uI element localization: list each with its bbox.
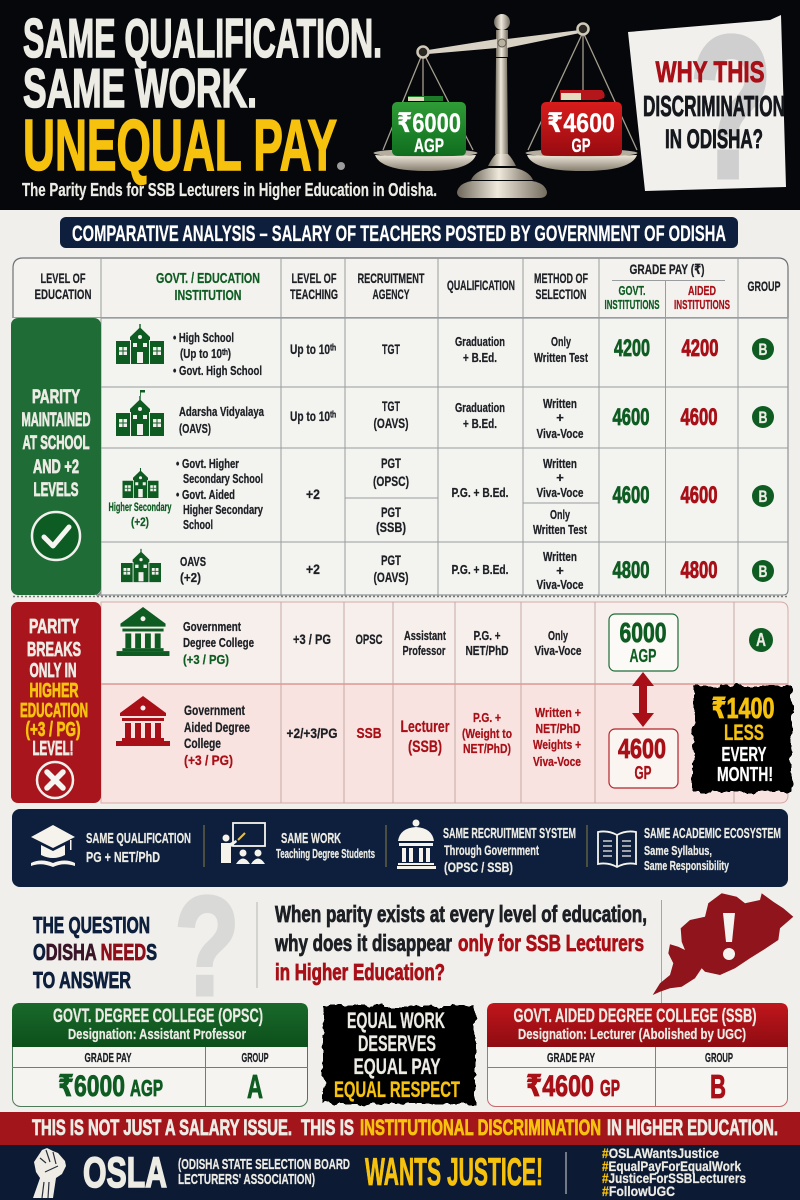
row: government aided degree college: 4600 [618,733,666,764]
icon: graduation cap [31,825,75,867]
table header: LEVEL OF [292,270,337,286]
red weight label [547,108,615,157]
row: higher secondary: (SSB) [376,519,406,535]
title: SAME QUALIFICATION. [23,7,382,69]
question text: in Higher Education? [275,959,445,985]
row: government aided degree college: NET/PhD) [463,741,511,756]
icon: open book [598,831,636,867]
text: same recruitment system [443,825,576,875]
row: higher secondary: P.G. + B.Ed. [452,485,508,500]
row: oavs +2: PGT [381,552,401,568]
row: high school: + B.Ed. [463,350,497,365]
icon: large question mark: ? [174,867,240,1026]
row: high school: (Up to 10ᵗʰ) [180,346,231,361]
row: government aided degree college: Lecturer [400,717,450,736]
callout: 1400 less every month: LESS [724,720,764,745]
arrow: pay gap [632,672,654,727]
question heading: ODISHA NEEDS [33,939,157,965]
text: same recruitment system: Through Government [444,842,539,858]
subtitle: The Parity Ends for SSB Lecturers in Higher Education in Odisha. [22,180,437,200]
panel: parity maintained: PARITY [32,387,80,408]
card: government aided degree college: ₹4600 [526,1070,594,1103]
row: government degree college: Only [548,628,569,643]
row: government degree college: Viva-Voce [534,643,582,658]
row: higher secondary: Viva-Voce [536,485,584,500]
callout: equal work equal pay: EQUAL WORK [347,1008,445,1033]
row: government degree college: P.G. + [474,628,501,643]
table header: INSTITUTIONS [604,297,660,312]
callout: equal work equal pay: EQUAL PAY [354,1054,441,1079]
row: government degree college: (+3 / PG) [183,652,229,667]
callout: equal work equal pay: EQUAL RESPECT [334,1077,460,1102]
green weight label: AGP [414,136,444,157]
table header: GOVT. [618,283,646,298]
callout: why this discrimination [628,0,786,222]
card: government degree college: GROUP [242,1050,269,1065]
text: same work [276,830,375,861]
row: government aided degree college: Written + [535,705,581,720]
card: government degree college: A [247,1068,263,1105]
row: adarsha vidyalaya: TGT [382,398,400,414]
header panel [0,0,800,222]
banner: institutional discrimination: THIS IS [301,1115,354,1140]
row: adarsha vidyalaya: Written [543,396,577,411]
row: oavs +2: (+2) [180,570,201,585]
panel: parity maintained: MAINTAINED [22,410,90,431]
question text: When parity exists at every level of education, [275,901,647,927]
row: adarsha vidyalaya: (OAVS) [179,421,211,436]
comparison table lower: higher education [11,602,792,803]
row: government aided degree college: Aided Degree [184,719,250,735]
row: oavs +2: (OAVS) [374,569,408,585]
row: oavs +2: Viva-Voce [536,577,584,592]
text: same recruitment system: (OPSC / SSB) [444,859,513,875]
text: same academic ecosystem [644,825,781,873]
row: adarsha vidyalaya: Graduation [455,400,505,415]
row: government aided degree college [116,696,678,788]
table header: GROUP [748,278,780,294]
row: government aided degree college: Viva-Voce [533,754,581,769]
table header: INSTITUTION [174,287,242,304]
card: government aided degree college: GROUP [705,1050,733,1065]
row: oavs +2: B [758,562,768,581]
card: government aided degree college [487,1003,788,1106]
table header: SELECTION [536,286,586,302]
row: oavs +2: +2 [306,561,320,577]
panel: parity breaks: PARITY [29,616,79,638]
row: higher secondary: PGT [381,504,401,520]
text: same qualification [86,830,191,866]
table header [34,261,780,312]
row: adarsha vidyalaya: (OAVS) [374,415,408,431]
row: government aided degree college: Weights + [533,737,581,752]
question text: only for SSB Lecturers [458,930,644,956]
row: government aided degree college: College [184,735,221,751]
table header: GRADE PAY (₹) [630,261,704,277]
callout: 1400 less every month: EVERY [722,744,767,766]
row: government aided degree college: NET/PhD [536,721,580,736]
row: high school: TGT [382,341,400,357]
text: same work: Teaching Degree Students [276,846,375,861]
row: higher secondary: Written Test [533,522,587,537]
row: adarsha vidyalaya: Adarsha Vidyalaya [179,404,265,419]
red weight label: ₹4600 [547,108,615,138]
row: government degree college: Government [183,619,242,634]
card: government degree college [12,1003,308,1106]
row: government degree college: +3 / PG [293,631,331,647]
icon: odisha map [653,893,793,1003]
callout: 1400 less every month: ₹1400 [712,693,774,725]
organisation name: OSLA [83,1149,167,1197]
card: government aided degree college: B [710,1068,726,1105]
row: oavs +2: 4800 [680,557,718,584]
row: government aided degree college: (Weight to [462,726,512,741]
panel: parity maintained: AND +2 [33,457,79,478]
table header: RECRUITMENT [358,270,425,286]
panel: parity maintained [11,318,101,595]
footer [0,1145,800,1200]
card: government degree college: AGP [130,1075,163,1101]
row: high school: 4200 [614,335,650,362]
question heading: TO ANSWER [33,967,131,993]
table header: INSTITUTIONS [674,297,730,312]
comparison table upper [11,258,788,596]
row: government aided degree college: (+3 / PG) [184,752,233,768]
row: adarsha vidyalaya: 4600 [680,404,718,431]
row: oavs +2 [121,549,774,592]
hashtags: #EqualPayForEqualWork [602,1159,741,1174]
icon: raised fist [33,1148,66,1198]
card: government degree college: GRADE PAY [84,1050,132,1065]
row: government degree college: OPSC [356,631,382,647]
row: high school: • High School [173,330,234,345]
row: government degree college: Degree College [183,635,254,650]
row: government aided degree college: SSB [356,725,382,742]
row: high school: • Govt. High School [173,363,262,378]
card: government degree college: GOVT. DEGREE COLLEGE (OPSC) [53,1006,263,1027]
text: same academic ecosystem: Same Syllabus, [644,843,712,858]
row: higher secondary: PGT [381,455,401,471]
table header: AGENCY [372,286,410,302]
text: same recruitment system: SAME RECRUITMENT SYSTEM [443,825,576,842]
panel: parity maintained: AT SCHOOL [22,433,90,454]
panel: parity breaks [11,602,101,803]
row: higher secondary: 4600 [680,482,718,509]
text: same work: SAME WORK [281,830,341,847]
icon: teacher and students [221,823,265,864]
banner: institutional discrimination: INSTITUTIONAL DISCRIMINATION [360,1115,601,1140]
row: higher secondary: Written [543,456,577,471]
organisation name: LECTURERS' ASSOCIATION) [178,1171,315,1188]
panel: parity breaks: BREAKS [27,639,81,661]
row: adarsha vidyalaya [116,390,774,441]
row: higher secondary: 4600 [612,482,650,509]
card: government aided degree college: GRADE PAY [547,1050,595,1065]
row: higher secondary: Secondary School [183,471,263,486]
row: government degree college: NET/PhD [466,643,508,658]
title [23,7,382,186]
row: higher secondary: B [758,487,768,506]
hashtags: #OSLAWantsJustice [602,1146,719,1161]
row: oavs +2: P.G. + B.Ed. [452,562,508,577]
question text [257,901,647,988]
callout: 1400 less every month: MONTH! [717,764,773,786]
row: high school: Graduation [455,334,505,349]
banner: institutional discrimination [0,1112,800,1145]
table header: QUALIFICATION [447,277,515,293]
icon: check mark [32,512,80,560]
banner: institutional discrimination: THIS IS NOT JUST A SALARY ISSUE. [32,1115,292,1140]
organisation name [83,1149,350,1197]
row: higher secondary: Higher Secondary [108,502,172,514]
question text: why does it disappear [274,930,452,956]
row: adarsha vidyalaya: + B.Ed. [463,416,497,431]
row: government degree college [117,607,773,671]
row: adarsha vidyalaya: 4600 [612,404,650,431]
row: government aided degree college: GP [634,763,652,783]
card: government degree college: Designation: Assistant Professor [68,1026,246,1043]
row: high school: Written Test [534,350,588,365]
row: oavs +2: 4800 [612,557,650,584]
table header: LEVEL OF [40,270,86,286]
panel: parity breaks: ONLY IN [30,660,76,682]
row: adarsha vidyalaya: B [758,408,768,427]
card: government aided degree college: GP [600,1075,620,1101]
row: higher secondary: School [183,517,213,532]
row: government aided degree college: P.G. + [473,710,501,725]
table header: AIDED [688,283,716,298]
row: government degree college: Assistant [404,628,446,643]
row: adarsha vidyalaya: + [556,410,564,425]
row: oavs +2: Written [543,549,577,564]
row: higher secondary: + [556,470,564,485]
icon: dome building [397,820,436,869]
row: government aided degree college: +2/+3/PG [286,725,338,741]
title: UNEQUAL PAY [23,106,337,186]
table header: EDUCATION [34,286,92,302]
panel: same strip [12,809,788,887]
row: high school [116,324,774,378]
row: oavs +2: OAVS [180,554,206,569]
row: high school: Up to 10ᵗʰ [290,341,336,357]
panel: parity breaks: LEVEL! [32,738,74,760]
hashtags [602,1146,746,1199]
hashtags: #JusticeForSSBLecturers [602,1171,746,1186]
text: same qualification: PG + NET/PhD [86,849,160,866]
table header: METHOD OF [534,270,588,286]
row: higher secondary [108,455,774,537]
card: government degree college: ₹6000 [58,1070,125,1103]
row: higher secondary: • Govt. Aided [176,487,235,502]
row: high school: B [758,340,768,359]
panel: parity breaks: (+3 / PG) [26,719,80,741]
row: government aided degree college: Government [184,702,245,718]
row: higher secondary: (+2) [131,517,149,529]
title: SAME WORK. [23,57,257,119]
row: higher secondary: +2 [306,486,320,502]
panel: parity maintained: LEVELS [34,480,78,501]
row: higher secondary: Only [550,507,571,522]
row: government degree college: Professor [402,643,446,658]
green weight label: ₹6000 [397,108,461,138]
panel: parity breaks: EDUCATION [20,700,88,722]
icon: balance scale [374,14,638,198]
row: higher secondary: Higher Secondary [183,502,264,517]
green weight label [397,108,461,157]
icon: cross mark [37,762,73,798]
table header: GOVT. / EDUCATION [156,270,260,287]
row: government degree college: A [756,630,766,650]
row: higher secondary: • Govt. Higher [176,456,239,471]
row: adarsha vidyalaya: Up to 10ᵗʰ [290,408,336,424]
row: government degree college: 6000 [620,617,666,648]
row: higher secondary: (OPSC) [373,473,409,489]
callout: why this discrimination: WHY THIS [656,56,764,89]
text: same qualification: SAME QUALIFICATION [86,830,191,847]
row: high school: 4200 [682,335,718,362]
organisation name: (ODISHA STATE SELECTION BOARD [178,1156,350,1173]
row: government aided degree college: (SSB) [408,737,442,756]
wants justice: WANTS JUSTICE! [365,1151,543,1194]
callout: 1400 less every month [693,686,792,792]
table header: TEACHING [290,286,338,302]
row: high school: Only [551,334,572,349]
hashtags: #FollowUGC [602,1184,675,1199]
panel: parity breaks: HIGHER [30,680,79,702]
row: oavs +2: + [556,563,564,578]
red weight label: GP [572,136,591,157]
row: government degree college: AGP [630,646,656,666]
question heading: THE QUESTION [33,912,150,938]
callout: equal work equal pay [323,1006,475,1104]
callout: equal work equal pay: DESERVES [358,1031,436,1056]
question heading [33,912,157,993]
row: adarsha vidyalaya: Viva-Voce [536,426,584,441]
text: same academic ecosystem: Same Responsibility [644,858,730,873]
